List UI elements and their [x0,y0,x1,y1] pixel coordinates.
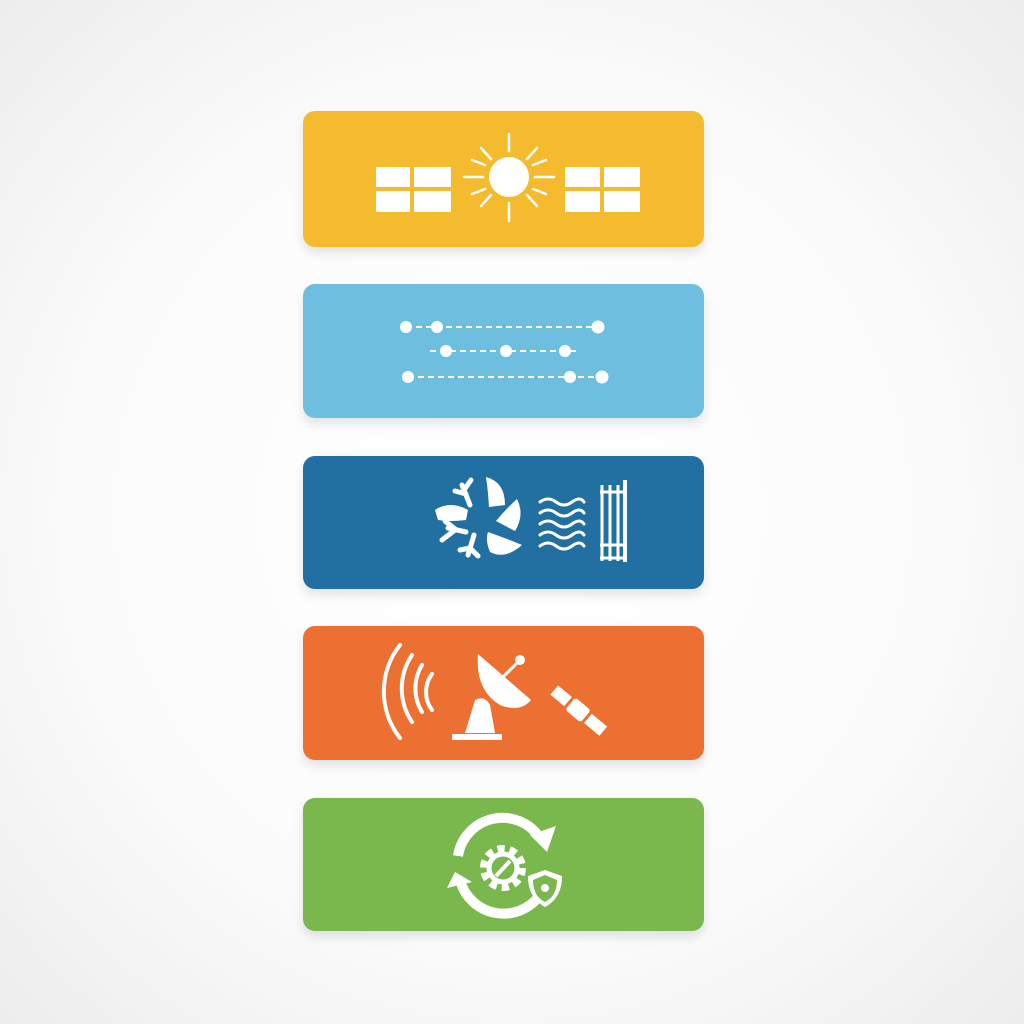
panel: solar [303,111,704,247]
icon: cycle arrows gear shield [447,818,562,914]
panel: maintenance [303,798,704,931]
icon: satellite [549,684,608,737]
icon: fan snowflake [435,477,522,556]
panel: communications [303,626,704,760]
icon: radiator [600,480,627,562]
icon: air waves [540,499,584,549]
panel: network lines [303,284,704,418]
icon: satellite dish [452,654,531,740]
icon: signal arcs [384,645,432,738]
icon: solar panels and sun [376,134,640,221]
icon: dotted lines [400,320,608,384]
panel: cooling [303,456,704,589]
